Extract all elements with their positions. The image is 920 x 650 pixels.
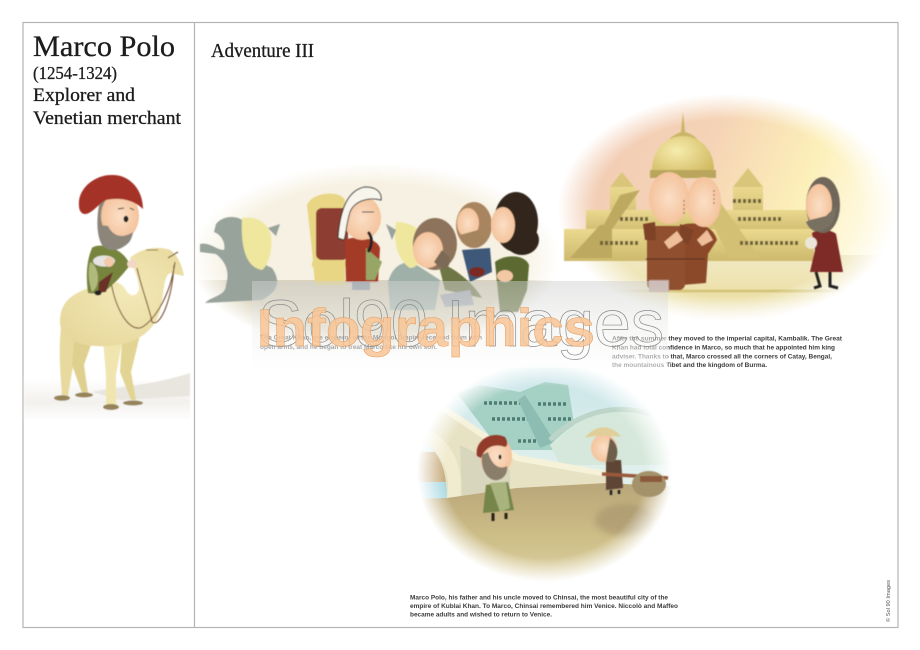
sky (426, 368, 666, 484)
caption: Kambalik: the mountainous Tibet and the kingdom of Burma. (612, 362, 767, 369)
illustration: Marco Polo on a camel (24, 175, 190, 421)
palace floor (204, 280, 546, 347)
near bridge (430, 413, 606, 498)
figures: two monks (643, 172, 721, 292)
illustration: imperial capital Kambalik (562, 97, 889, 318)
caption: Great Khan: The Great Khan, the emperor of the Mongol Empire received them with (260, 334, 482, 342)
credit: © Sol 90 Images (885, 580, 892, 622)
title: Marco Polo: Venetian merchant (33, 108, 182, 129)
caption: Chinsai: empire of Kublai Khan. To Marco, Chinsai remembered him Venice. Niccolò and Maffeo (410, 603, 678, 610)
title: Marco Polo (33, 30, 182, 129)
ground (423, 483, 670, 580)
illustration: the city of Chinsai (419, 368, 670, 580)
heading: Adventure III: Adventure III (211, 40, 314, 62)
caption: Chinsai: Marco Polo, his father and his uncle moved to Chinsai, the most beautiful city of the (410, 594, 668, 602)
figure: Maffeo (456, 202, 492, 282)
caption: Kambalik: Khan had total confidence in Marco, so much that he appointed him king (612, 344, 835, 352)
caption: Kambalik (612, 336, 843, 369)
palace with golden dome (564, 112, 830, 261)
throne (307, 194, 348, 285)
figure: Marco (805, 177, 843, 288)
caption: Kambalik: adviser. Thanks to that, Marco crossed all the corners of Catay, Bengal, (612, 354, 832, 360)
title: Marco Polo: (1254-1324) (33, 63, 117, 84)
courtyard (584, 255, 874, 318)
caption: Chinsai (410, 594, 678, 618)
caption: Great Khan: open arms, and he began to treat Marco like his own son. (260, 344, 437, 351)
figure: Marco at Chinsai (477, 435, 514, 521)
watermark: Infographics (257, 299, 595, 358)
title: Marco Polo: Marco Polo (33, 30, 175, 63)
title: Marco Polo: Explorer and (33, 85, 136, 106)
figure: Great Khan (338, 187, 382, 290)
watermark: Sol90 Images (258, 286, 664, 360)
river (419, 452, 446, 482)
caption: Great Khan (260, 334, 482, 351)
figure: young Marco (491, 192, 539, 312)
figure: Niccolò bowing (413, 218, 482, 307)
sky (562, 97, 889, 255)
griffin statue right (386, 222, 440, 310)
teal palace (460, 382, 574, 450)
wall background (202, 169, 548, 280)
caption: Chinsai: became adults and wished to return to Venice. (410, 612, 552, 618)
illustration: meeting the Great Khan (200, 169, 550, 347)
griffin statue left (200, 217, 280, 303)
caption: Kambalik: After the summer they moved to the imperial capital, Kambalik. The Great (612, 336, 843, 342)
figure: porter with basket (585, 427, 668, 497)
far bridge (550, 412, 658, 465)
